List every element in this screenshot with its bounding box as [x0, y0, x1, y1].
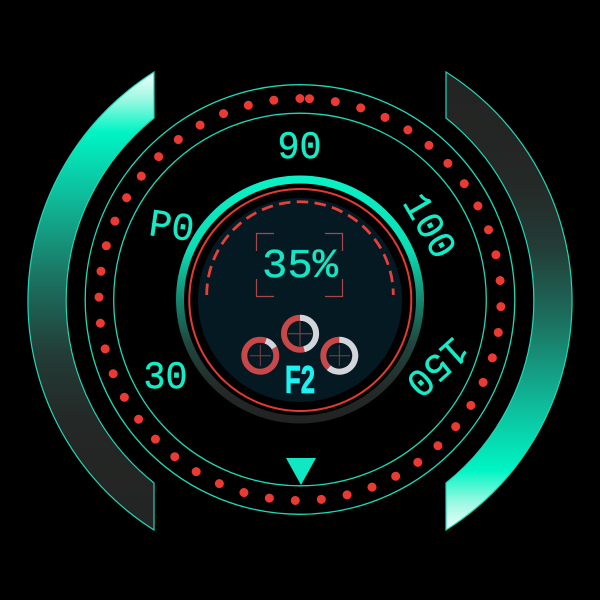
- percentage readout: 35%: [262, 244, 338, 290]
- dashed red arc: [207, 202, 393, 295]
- scale label 150: 150: [396, 326, 476, 405]
- small donut middle: [284, 318, 316, 350]
- dial face: [198, 198, 402, 402]
- scale label 30: 30: [144, 356, 188, 400]
- central dial: [180, 180, 420, 420]
- gear label F2: F2: [285, 359, 315, 402]
- scale label 60: P0: [146, 203, 197, 253]
- scale label 100: 100: [392, 187, 464, 267]
- scale label 90: 90: [278, 126, 322, 170]
- small donut right: [323, 340, 355, 372]
- red dot ring: [90, 89, 510, 510]
- right outer arc: [446, 72, 572, 530]
- small donut left: [244, 340, 276, 372]
- dial gradient ring: [180, 180, 420, 420]
- inner thin ring: [114, 113, 486, 486]
- pointer triangle: [286, 458, 316, 485]
- outer thin ring: [85, 85, 515, 514]
- left outer arc: [28, 72, 154, 530]
- dial red ring: [189, 189, 411, 411]
- corner brackets: [256, 234, 342, 296]
